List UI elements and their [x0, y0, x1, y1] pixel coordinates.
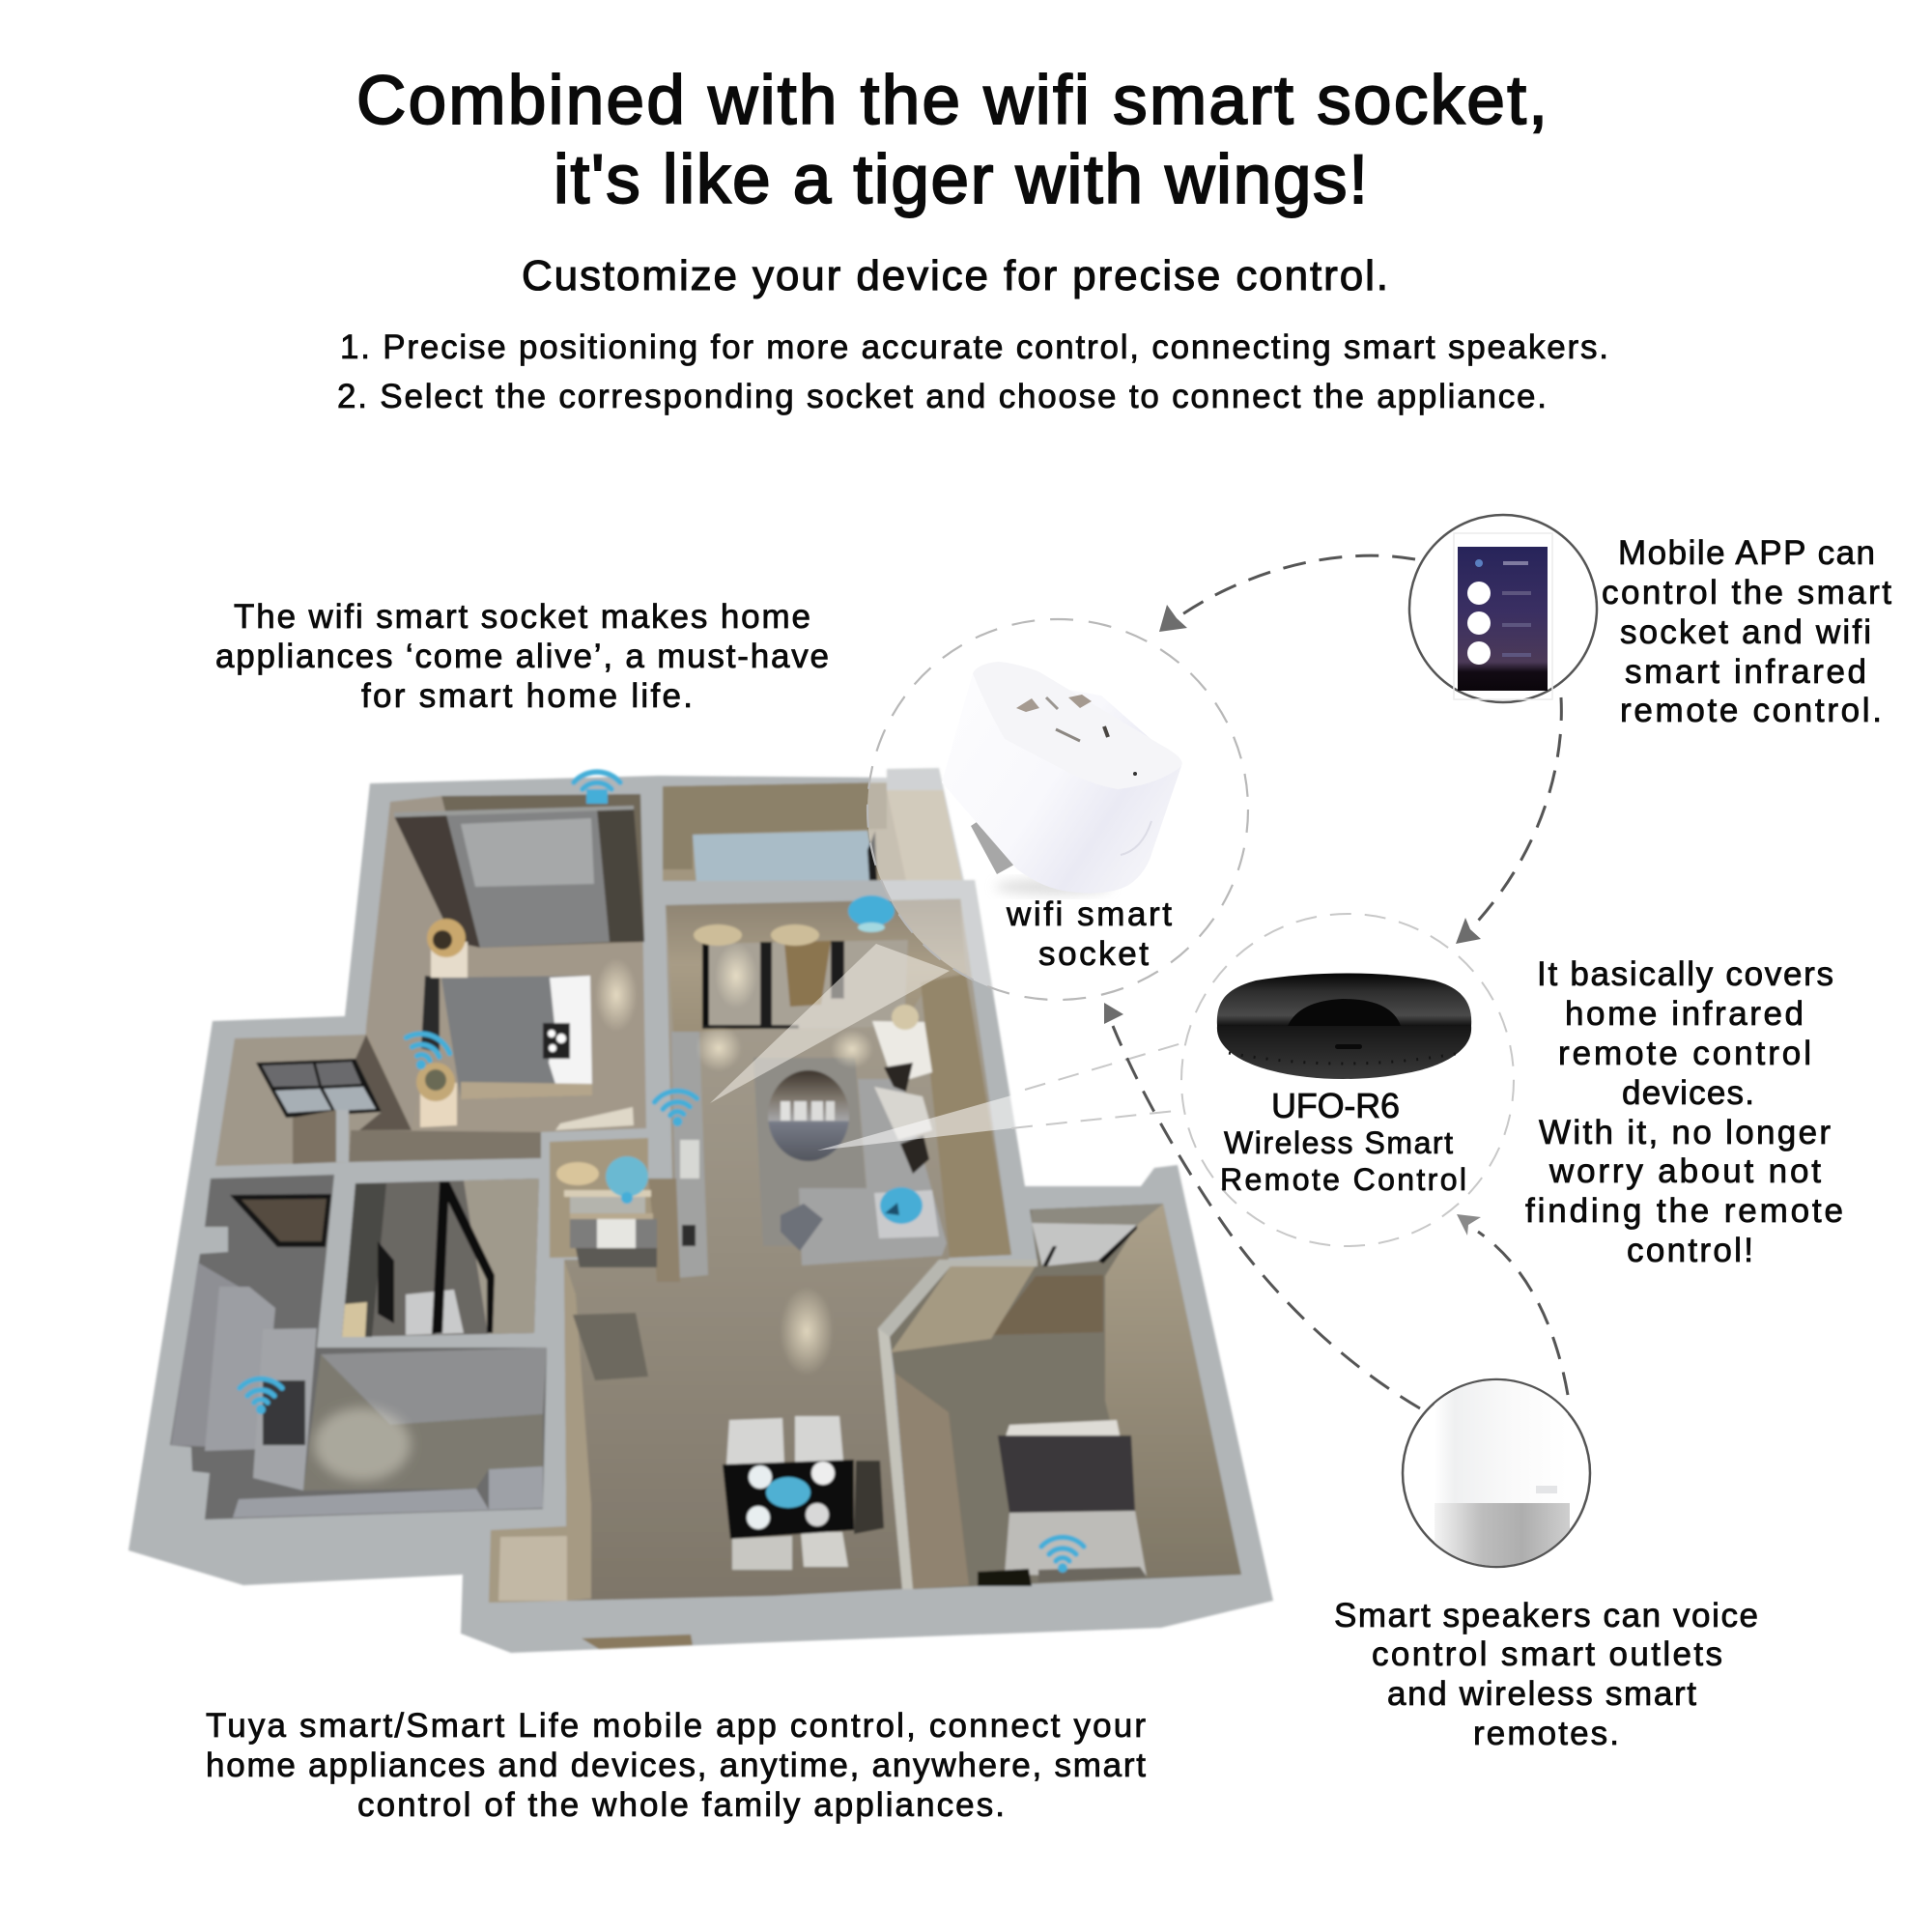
room: hallway floor	[349, 1130, 541, 1162]
room: bottom left closet	[489, 1526, 567, 1603]
arrow: phone to remote	[1456, 697, 1561, 944]
title: Combined with the wifi smart socket,	[356, 63, 1548, 139]
outer wall silhouette	[128, 768, 1273, 1653]
text: socket intro: The wifi smart socket makes home	[234, 598, 810, 636]
side wall panel	[921, 974, 1011, 1258]
icon: wifi smart socket	[942, 662, 1182, 895]
text: socket intro: for smart home life.	[361, 677, 693, 715]
thin beige partition	[564, 1260, 591, 1601]
bed	[421, 976, 592, 1099]
wifi icon 9	[1041, 1537, 1084, 1573]
icon: mobile app phone	[1409, 515, 1597, 702]
text: remote description: remote control	[1558, 1035, 1811, 1072]
text: mobile app: remote control.	[1620, 692, 1882, 729]
tv wall	[694, 924, 908, 1029]
room: dark bath left	[170, 1175, 547, 1520]
title	[356, 63, 1548, 218]
lower bed	[978, 1420, 1147, 1586]
text: mobile app	[1602, 534, 1891, 729]
text: mobile app: smart infrared	[1625, 653, 1866, 691]
socket holes	[1016, 695, 1108, 741]
text: mobile app: control the smart	[1602, 574, 1891, 611]
socket callout cone	[710, 944, 950, 1103]
label: UFO-R6: UFO-R6	[1271, 1086, 1400, 1125]
text: remote description: finding the remote	[1525, 1192, 1843, 1230]
text: socket intro: appliances ‘come alive’, a must-have	[215, 638, 829, 675]
wifi icon 2	[398, 1028, 453, 1077]
wifi icon 1	[574, 772, 620, 804]
text: remote description: devices.	[1622, 1074, 1754, 1112]
room: shelf niche	[550, 1138, 680, 1282]
numbered list: 1. Precise positioning for more accurate control, connecting smart speakers.	[340, 328, 1608, 366]
floor plan illustration	[128, 768, 1273, 1653]
text: socket intro	[215, 598, 829, 715]
round table	[768, 1070, 849, 1161]
remote callout cone	[817, 1090, 1184, 1151]
text: remote description: control!	[1627, 1232, 1753, 1269]
label: wifi smart socket: socket	[1038, 935, 1149, 973]
rug	[573, 1313, 648, 1380]
text: remote description	[1525, 955, 1843, 1269]
text: app control: control of the whole family appliances.	[357, 1786, 1005, 1824]
icon: smart speaker	[1403, 1379, 1590, 1567]
dining set	[723, 1416, 884, 1570]
nightstands and lamps	[416, 919, 468, 1127]
label: UFO-R6: Wireless Smart	[1224, 1125, 1453, 1160]
text: remote description: worry about not	[1548, 1152, 1821, 1190]
wifi icon 4	[606, 1156, 648, 1204]
icon: UFO-R6 remote	[1217, 974, 1471, 1079]
socket dashed circle	[867, 619, 1248, 1000]
wifi icon 3	[654, 1090, 699, 1128]
label: UFO-R6: Remote Control	[1220, 1162, 1466, 1197]
wifi icon 7	[880, 1187, 923, 1224]
room: lower right bedroom	[878, 1204, 1241, 1589]
label: wifi smart socket	[1006, 895, 1172, 973]
room: main living and hall floor	[564, 895, 1011, 1601]
text: remote description: It basically covers	[1537, 955, 1833, 993]
text: app control	[206, 1707, 1146, 1824]
text: smart speakers: control smart outlets	[1372, 1635, 1722, 1673]
text: remote description: With it, no longer	[1539, 1114, 1831, 1151]
arrow: speaker to socket	[1104, 1003, 1420, 1408]
text: smart speakers: and wireless smart	[1387, 1675, 1696, 1713]
remote dashed circle	[1011, 914, 1514, 1246]
wall pieces	[317, 880, 978, 1530]
text: smart speakers: Smart speakers can voice	[1334, 1597, 1758, 1634]
subtitle: Customize your device for precise control.	[522, 252, 1388, 299]
room: mid dressing room	[342, 1179, 539, 1337]
text: mobile app: socket and wifi	[1620, 613, 1871, 651]
room: top glazed balcony	[663, 782, 962, 885]
numbered list: 2. Select the corresponding socket and choose to connect the appliance.	[337, 378, 1547, 415]
speckled rug	[753, 1058, 867, 1246]
room: balcony	[215, 1035, 412, 1166]
room: master bedroom	[349, 794, 646, 1162]
wifi icon 6	[848, 895, 895, 932]
numbered list	[337, 328, 1608, 415]
cabinet strip	[671, 1032, 708, 1278]
text: remote description: home infrared	[1565, 995, 1804, 1033]
text: app control: home appliances and devices, anytime, anywhere, smart	[206, 1747, 1146, 1784]
wifi icon 5	[240, 1378, 282, 1414]
label: wifi smart socket: wifi smart	[1006, 895, 1172, 933]
arrow: phone to socket	[1159, 555, 1415, 632]
window slot in front wall	[582, 1634, 693, 1649]
text: app control: Tuya smart/Smart Life mobile app control, connect your	[206, 1707, 1146, 1745]
wifi icon 8	[766, 1477, 810, 1508]
label: UFO-R6	[1220, 1086, 1466, 1197]
arrow: speaker to remote	[1457, 1214, 1568, 1395]
text: smart speakers: remotes.	[1473, 1715, 1619, 1752]
text: mobile app: Mobile APP can	[1618, 534, 1875, 572]
title: it's like a tiger with wings!	[554, 142, 1368, 218]
text: smart speakers	[1334, 1597, 1758, 1752]
sofa	[781, 1005, 947, 1265]
